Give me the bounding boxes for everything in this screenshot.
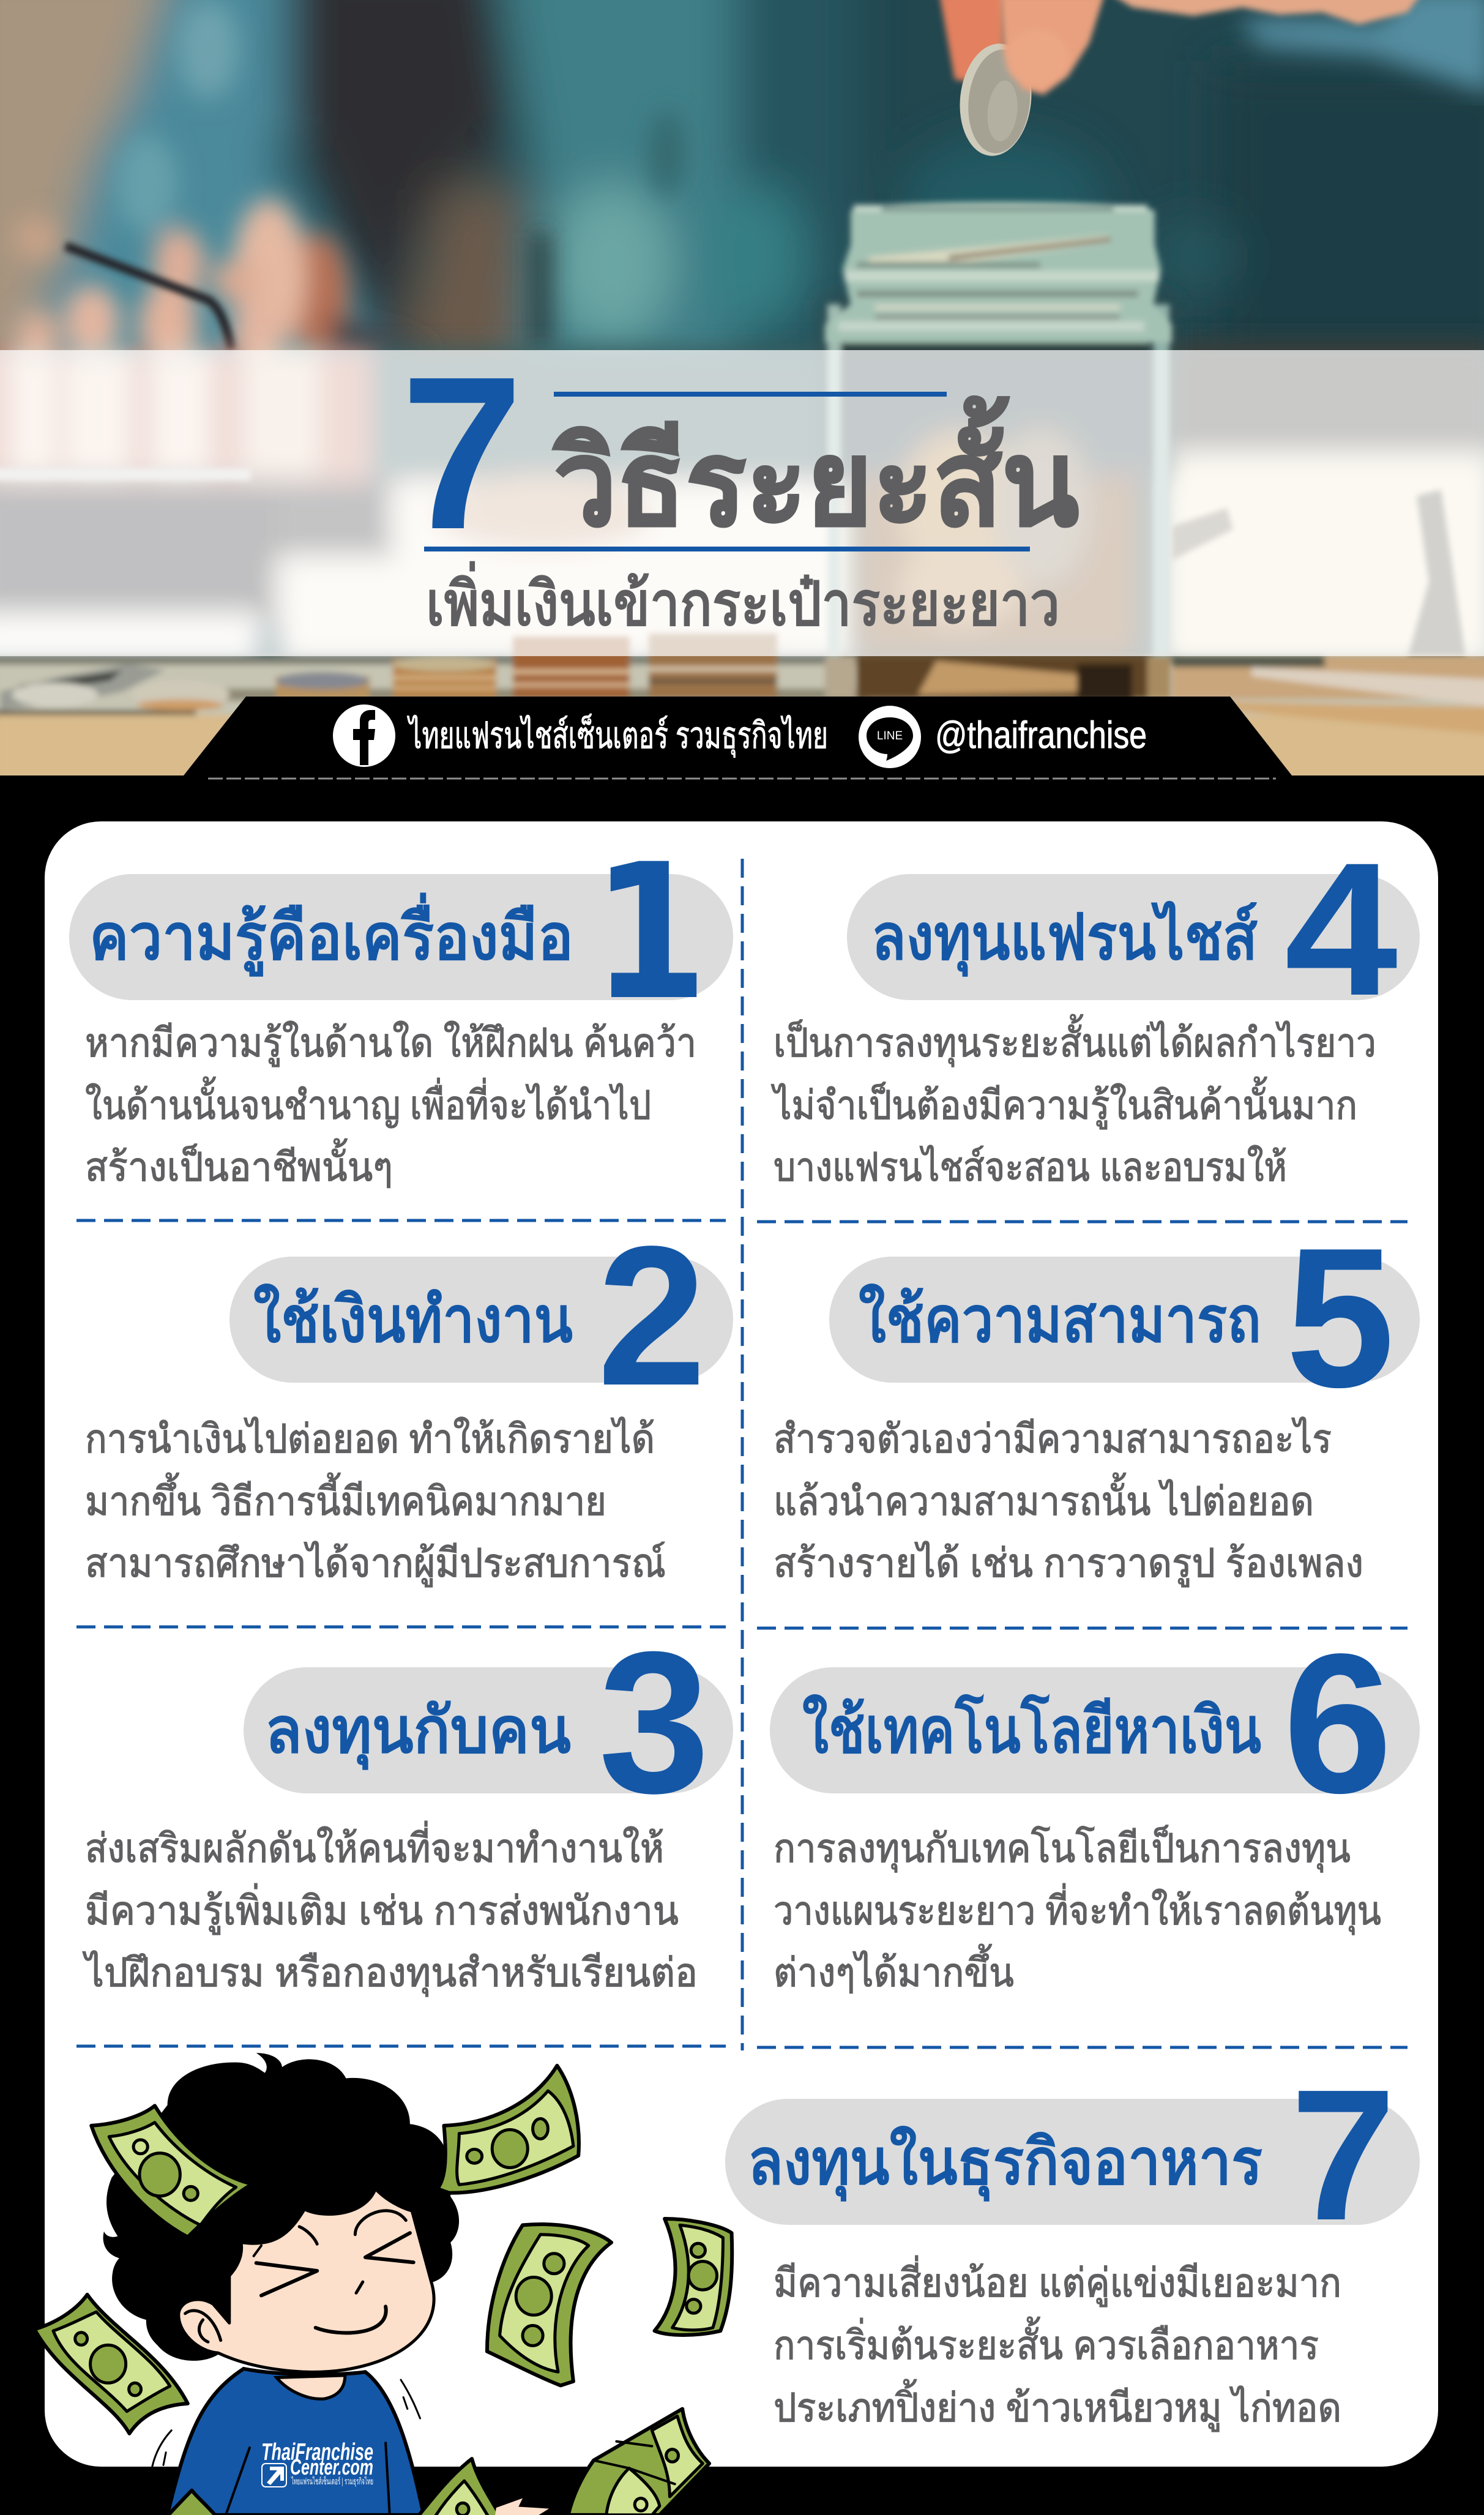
item 4: ลงทุนแฟรนไชส์ [871,901,1258,977]
item 5: 5 [1286,1206,1395,1429]
shirt logo: ไทยแฟรนไชส์เซ็นเตอร์ | รวมธุรกิจไทย [291,2475,373,2487]
item 3: ไปฝึกอบรม หรือกองทุนสำหรับเรียนต่อ [82,1950,698,1997]
item 7 [725,2050,1420,2432]
social strip [0,697,1484,796]
header photo: hand dropping coin into jar [0,0,1484,782]
divider row 1 right [757,1220,1408,1223]
item 7: 7 [1291,2050,1396,2259]
scene under the banner [0,343,1484,664]
item 6: 6 [1283,1612,1392,1834]
icon: line: LINE [877,730,903,742]
jar neck [825,202,1172,343]
divider row 3 left [76,2044,726,2048]
item 1: ในด้านนั้นจนชำนาญ เพื่อที่จะได้นำไป [85,1077,651,1128]
item 5: สำรวจตัวเองว่ามีความสามารถอะไร [774,1416,1332,1461]
neck [277,2375,345,2399]
item 3: ส่งเสริมผลักดันให้คนที่จะมาทำงานให้ [85,1821,664,1870]
divider row 3 right [757,2046,1408,2049]
item 3: ลงทุนกับคน [265,1695,571,1770]
shirt logo [261,2439,373,2487]
item 1: หากมีความรู้ในด้านใด ให้ฝึกฝน ค้นคว้า [85,1020,696,1067]
glass jar: walls and base [825,202,1172,701]
illustration: happy character with flying banknotes [34,2053,732,2515]
banknote on hair [91,2106,252,2237]
panel: white content card [45,821,1438,2467]
shirt sleeve lines [226,2443,390,2515]
item 2: สามารถศึกษาได้จากผู้มีประสบการณ์ [85,1541,666,1587]
line handle: @thaifranchise [935,714,1147,757]
item 2: ใช้เงินทำงาน [253,1284,573,1356]
item 7: ลงทุนในธุรกิจอาหาร [748,2126,1262,2202]
logo arrow [262,2464,286,2487]
item 6: วางแผนระยะยาว ที่จะทำให้เราลดต้นทุน [774,1883,1381,1935]
item 4: ไม่จำเป็นต้องมีความรู้ในสินค้านั้นมาก [770,1077,1357,1129]
title rule bottom [424,547,1030,551]
item 6: ต่างๆได้มากขึ้น [774,1944,1014,1995]
face [179,2189,434,2372]
title number 7: 7 [401,332,523,575]
left hand [288,233,349,355]
character body [168,2369,423,2515]
hair [103,2053,459,2361]
icon: facebook [333,704,395,767]
item 7: การเริ่มต้นระยะสั้น ควรเลือกอาหาร [774,2317,1319,2367]
item 6 [770,1612,1420,1995]
item 5: สร้างรายได้ เช่น การวาดรูป ร้องเพลง [774,1541,1363,1587]
item 3 [82,1609,733,1997]
divider row 1 left [76,1219,726,1222]
item 3: มีความรู้เพิ่มเติม เช่น การส่งพนักงาน [85,1883,679,1935]
item 2: มากขึ้น วิธีการนี้มีเทคนิคมากมาย [85,1473,606,1523]
coin [960,43,1032,156]
item 3: 3 [598,1609,710,1835]
banknote right [655,2219,732,2335]
item 6: ใช้เทคโนโลยีหาเงิน [802,1694,1261,1766]
translucent title banner [0,350,1484,656]
glass jar: coins seen through the banner [825,300,1172,656]
item 1: 1 [592,824,708,1041]
item 1: สร้างเป็นอาชีพนั้นๆ [85,1138,393,1189]
item 1 [69,824,733,1189]
item 5: แล้วนำความสามารถนั้น ไปต่อยอด [774,1473,1314,1523]
banknote top right [438,2066,579,2193]
banknote lower left [165,2491,218,2515]
banknote centre [487,2224,611,2385]
item 2: 2 [597,1205,706,1427]
banknote left [34,2295,188,2434]
item 6: การลงทุนกับเทคโนโลยีเป็นการลงทุน [774,1825,1351,1873]
dashed rule under strip [208,777,1276,780]
item 4: บางแฟรนไชส์จะสอน และอบรมให้ [774,1145,1287,1189]
coin stacks [0,633,1484,782]
title heading: วิธีระยะสั้น [553,396,1079,550]
item 7: มีความเสี่ยงน้อย แต่คู่แข่งมีเยอะมาก [774,2255,1341,2307]
divider row 2 left [76,1626,726,1628]
item 4 [770,823,1420,1189]
item 1: ความรู้คือเครื่องมือ [89,892,573,977]
shirt logo: ThaiFranchise [261,2439,373,2465]
facebook page name: ไทยแฟรนไชส์เซ็นเตอร์ รวมธุรกิจไทย [407,714,828,758]
vertical divider [740,859,744,2050]
shirt logo: Center.com [290,2454,373,2479]
item 7: ประเภทปิ้งย่าง ข้าวเหนียวหมู ไก่ทอด [774,2379,1341,2432]
icon: line [859,706,921,768]
face features [185,2211,414,2342]
hand [494,2498,549,2515]
subtitle: เพิ่มเงินเข้ากระเป๋าระยะยาว [426,561,1060,638]
banknote bundle [569,2409,709,2515]
divider row 2 right [757,1627,1408,1629]
item 4: 4 [1285,823,1399,1035]
title rule top [554,392,947,397]
item 5 [774,1206,1420,1587]
motion lines [152,2380,420,2467]
item 2: การนำเงินไปต่อยอด ทำให้เกิดรายได้ [85,1416,655,1461]
item 4: เป็นการลงทุนระยะสั้นแต่ได้ผลกำไรยาว [774,1014,1376,1067]
item 2 [85,1205,733,1587]
banknote lower centre [416,2459,502,2515]
right hand: fingers [939,0,1004,86]
item 5: ใช้ความสามารถ [859,1284,1261,1356]
